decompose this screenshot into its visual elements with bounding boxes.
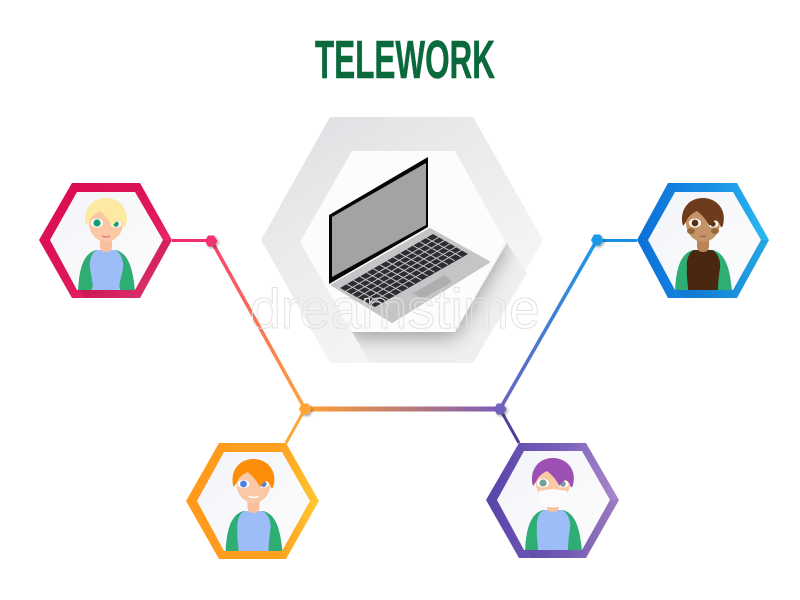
node: orange junction xyxy=(299,404,312,414)
node: purple junction xyxy=(494,404,506,414)
title: TELEWORK xyxy=(315,31,495,90)
watermark: dreamstime xyxy=(250,277,540,340)
connector lines xyxy=(172,240,637,443)
laptop screen bezel xyxy=(329,157,428,284)
hexagon frame xyxy=(186,443,319,559)
avatar: purple-haired person with mask xyxy=(525,458,582,551)
panel: purple person hexagon xyxy=(486,443,619,558)
panel: orange person hexagon xyxy=(186,443,319,559)
node: red line xyxy=(205,236,218,246)
avatar: orange-haired person xyxy=(226,459,282,552)
frame shading xyxy=(80,240,172,298)
hexagon frame xyxy=(486,443,619,558)
outer hexagon xyxy=(261,117,543,363)
keyboard xyxy=(340,234,468,307)
avatar: blonde person xyxy=(78,198,135,291)
inner hexagon xyxy=(300,151,505,332)
panel: blue person hexagon xyxy=(637,183,769,298)
panel: red person hexagon xyxy=(39,183,172,298)
laptop base xyxy=(332,229,489,322)
node: blue line xyxy=(591,234,604,246)
hexagon frame xyxy=(637,183,769,298)
touchpad xyxy=(413,275,452,299)
hexagon frame xyxy=(39,183,172,298)
laptop xyxy=(329,157,489,322)
laptop screen xyxy=(332,163,426,277)
frame shading xyxy=(678,240,769,298)
central hexagon with laptop xyxy=(261,117,543,370)
hexagon shadow xyxy=(352,243,527,363)
avatar: brown-haired person xyxy=(675,198,732,291)
frame shading xyxy=(527,500,619,558)
